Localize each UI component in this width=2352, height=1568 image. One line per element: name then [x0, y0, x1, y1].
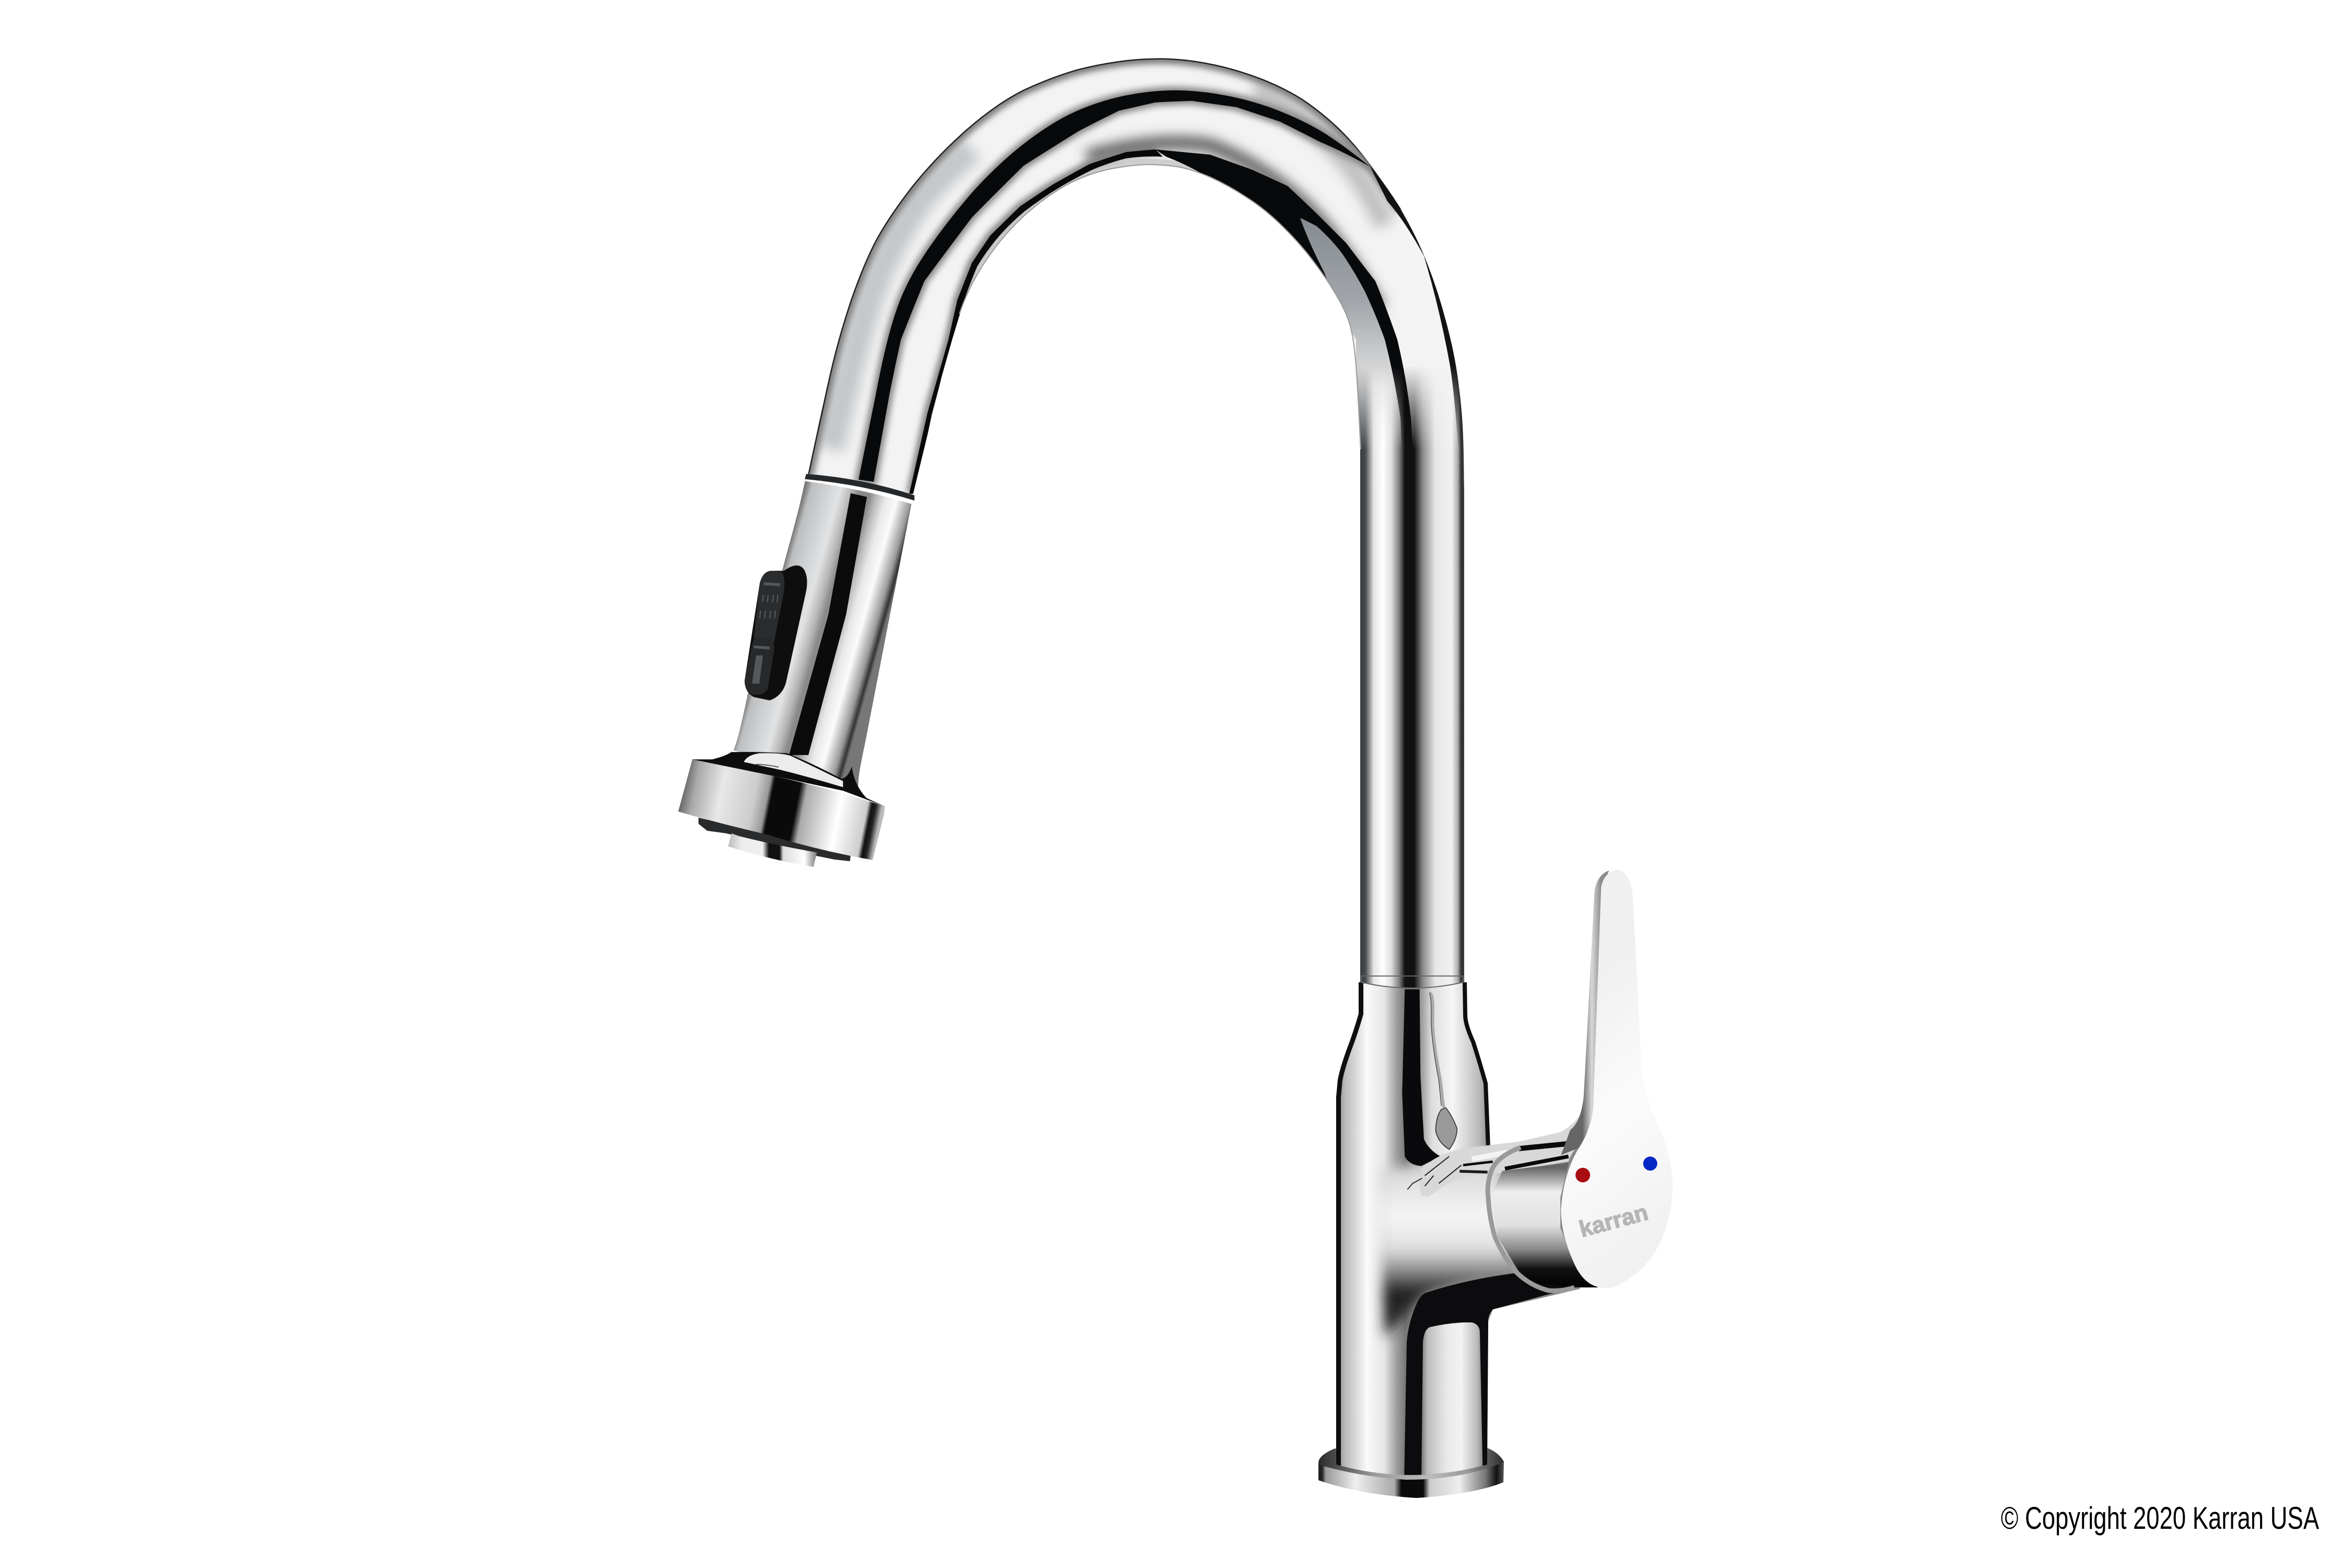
- drip reflection: [1429, 993, 1457, 1149]
- seam ring: [805, 474, 914, 501]
- lever barrel: [1490, 1163, 1598, 1287]
- riser bottom lip: [1361, 976, 1463, 988]
- lever top strip: [1407, 1117, 1585, 1197]
- center aerator: [728, 833, 817, 867]
- lower pedestal: [1421, 1322, 1483, 1484]
- main body: [1336, 982, 1580, 1475]
- hot indicator: [1575, 1168, 1590, 1182]
- riser blend: [1353, 361, 1468, 502]
- central dark reflection: [1402, 989, 1441, 1166]
- inner edge line: [960, 165, 1360, 449]
- cold indicator: [1643, 1157, 1658, 1170]
- vertical riser pipe: [1360, 494, 1464, 988]
- dark cutout under lever: [1404, 1273, 1574, 1484]
- right outer dark band: [1370, 167, 1464, 496]
- spray selector button: [745, 565, 807, 700]
- curl tip: [1407, 1178, 1422, 1190]
- base top plate: [1318, 1448, 1504, 1480]
- arm reflection: [1380, 1152, 1515, 1338]
- right dark edge: [1467, 982, 1490, 1148]
- upper dark reflection: [859, 90, 1370, 482]
- faucet body with lever and base: [1318, 869, 1673, 1498]
- barrel dark reflection: [789, 493, 867, 755]
- deck base ring: [1318, 1448, 1504, 1498]
- grey lens reflection: [1300, 218, 1405, 496]
- product photo: chrome pull-down kitchen faucet: [678, 58, 2319, 1535]
- barrel ring: [1488, 1147, 1574, 1291]
- pull-down spray head: [678, 474, 914, 867]
- left dark edge: [1336, 982, 1359, 1468]
- nozzle ring: [699, 818, 851, 861]
- shoulder highlight: [744, 753, 843, 787]
- handle face: [1561, 869, 1673, 1288]
- spray head barrel: [734, 481, 911, 786]
- flange shoulder: [692, 752, 885, 806]
- gooseneck arched spout: [808, 58, 1464, 495]
- inner rim: [960, 165, 1229, 314]
- flange face: [678, 759, 885, 860]
- inner right dark mass: [1155, 149, 1416, 502]
- handle side: [1561, 870, 1609, 1155]
- flange face shading: [678, 759, 885, 860]
- brand logo: karran: [1577, 1200, 1651, 1242]
- inner left dark reflection: [909, 149, 1163, 494]
